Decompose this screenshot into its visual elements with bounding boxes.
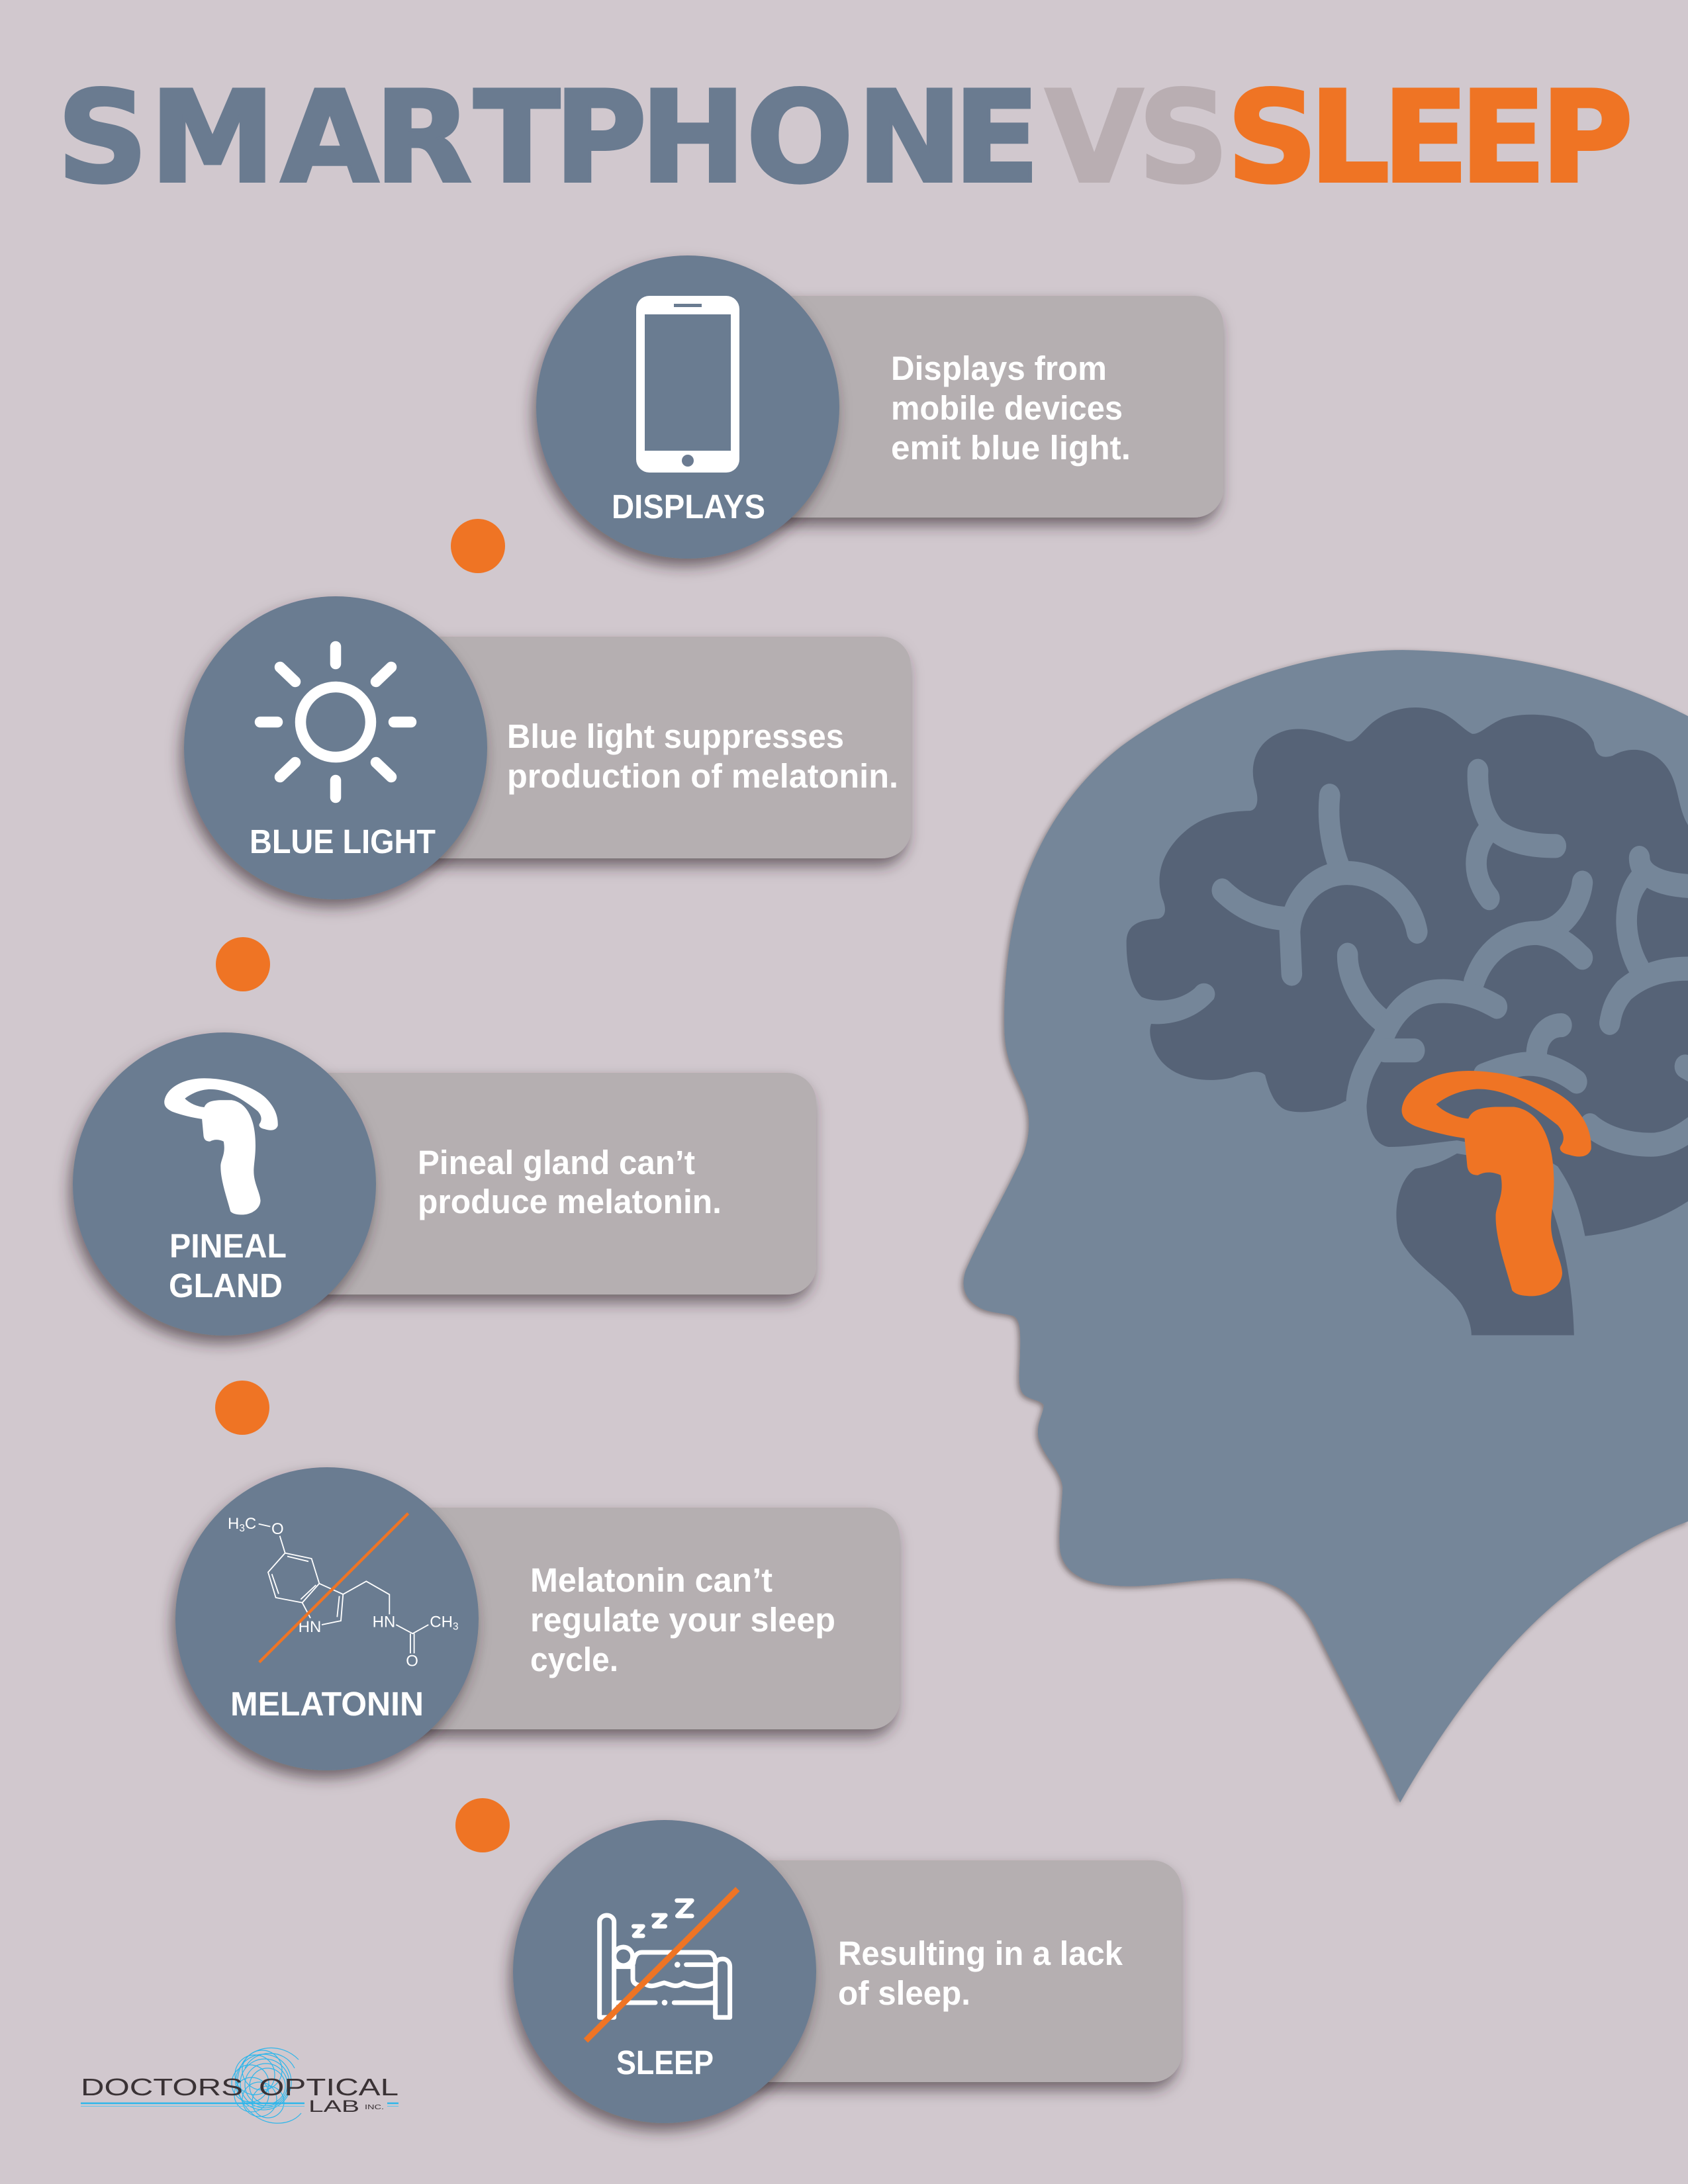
text: sleep: Resulting in a lack bbox=[838, 1934, 1123, 1972]
circle: melatonin bbox=[175, 1467, 479, 1770]
head outline bbox=[964, 650, 1688, 1803]
title bbox=[57, 65, 1633, 210]
icon: melatonin molecule: C bbox=[245, 1515, 256, 1533]
icon: sun bbox=[260, 647, 411, 797]
panel: sleep bbox=[513, 1820, 1182, 2123]
circle: blue light bbox=[184, 596, 487, 899]
label: pineal gland bbox=[169, 1227, 287, 1304]
panel: blue light bbox=[184, 596, 911, 899]
label: melatonin: MELATONIN bbox=[230, 1685, 424, 1723]
icon: melatonin molecule: O bbox=[271, 1520, 284, 1538]
card: blue light bbox=[336, 637, 911, 858]
text: displays bbox=[891, 349, 1131, 467]
icon: melatonin molecule: H bbox=[228, 1515, 239, 1533]
card: melatonin bbox=[327, 1508, 900, 1729]
text: displays: mobile devices bbox=[891, 389, 1123, 427]
text: melatonin: cycle. bbox=[530, 1641, 618, 1678]
pineal gland highlight bbox=[1402, 1071, 1591, 1296]
panel: pineal gland bbox=[73, 1032, 816, 1336]
text: blue light: production of melatonin. bbox=[507, 757, 898, 795]
icon: melatonin molecule: CH bbox=[430, 1613, 453, 1631]
text: displays: emit blue light. bbox=[891, 429, 1131, 467]
icon: melatonin molecule: HN bbox=[373, 1613, 395, 1631]
connector dot 1 bbox=[451, 519, 505, 573]
connector dot 4 bbox=[455, 1798, 510, 1852]
card: sleep bbox=[665, 1860, 1182, 2082]
panel: melatonin bbox=[175, 1467, 900, 1770]
logo wordmark: INC. bbox=[365, 2104, 384, 2111]
logo: doctors optical lab bbox=[81, 2048, 399, 2123]
connector dot 3 bbox=[215, 1381, 269, 1435]
text: sleep: of sleep. bbox=[838, 1974, 970, 2012]
text: sleep bbox=[838, 1934, 1123, 2012]
logo wordmark: DOCTORS bbox=[81, 2073, 243, 2101]
card: pineal gland bbox=[224, 1073, 816, 1295]
brain bbox=[1127, 707, 1688, 1335]
card: displays bbox=[688, 296, 1223, 518]
panel: displays bbox=[536, 255, 1223, 559]
label: sleep: SLEEP bbox=[616, 2044, 714, 2081]
label: pineal gland: GLAND bbox=[169, 1267, 283, 1304]
icon: melatonin molecule bbox=[228, 1514, 458, 1670]
logo lines bbox=[81, 2103, 399, 2106]
label: displays: DISPLAYS bbox=[612, 488, 765, 525]
text: melatonin: regulate your sleep bbox=[530, 1601, 835, 1639]
logo wordmark: LAB bbox=[308, 2097, 359, 2116]
icon: smartphone bbox=[636, 296, 739, 473]
text: pineal gland bbox=[418, 1144, 722, 1220]
circle: sleep bbox=[513, 1820, 816, 2123]
text: displays: Displays from bbox=[891, 349, 1107, 387]
label: pineal gland: PINEAL bbox=[169, 1227, 287, 1265]
circle: displays bbox=[536, 255, 839, 559]
text: pineal gland: Pineal gland can’t bbox=[418, 1144, 695, 1181]
icon: melatonin molecule: 3 bbox=[239, 1523, 245, 1534]
title: smartphone: SMARTPHONE bbox=[57, 65, 1039, 210]
logo wordmark: OPTICAL bbox=[259, 2073, 399, 2101]
title: vs: VS bbox=[1046, 65, 1229, 210]
icon: melatonin molecule: O bbox=[406, 1653, 418, 1670]
head silhouette with brain bbox=[964, 650, 1688, 1803]
text: blue light: Blue light suppresses bbox=[507, 717, 844, 755]
title: sleep: SLEEP bbox=[1227, 65, 1633, 210]
logo eye graphic bbox=[232, 2048, 301, 2123]
connector dot 2 bbox=[216, 937, 270, 991]
logo wordmark bbox=[81, 2073, 399, 2116]
icon: melatonin molecule: 3 bbox=[453, 1621, 458, 1632]
text: melatonin: Melatonin can’t bbox=[530, 1561, 773, 1599]
icon: pineal gland bbox=[164, 1078, 278, 1214]
circle: pineal gland bbox=[73, 1032, 376, 1336]
text: melatonin bbox=[530, 1561, 835, 1678]
icon: melatonin molecule: HN bbox=[299, 1618, 321, 1636]
icon: bed with z's crossed out bbox=[586, 1889, 737, 2040]
text: blue light bbox=[507, 717, 898, 795]
label: blue light: BLUE LIGHT bbox=[250, 823, 436, 860]
text: pineal gland: produce melatonin. bbox=[418, 1183, 722, 1220]
